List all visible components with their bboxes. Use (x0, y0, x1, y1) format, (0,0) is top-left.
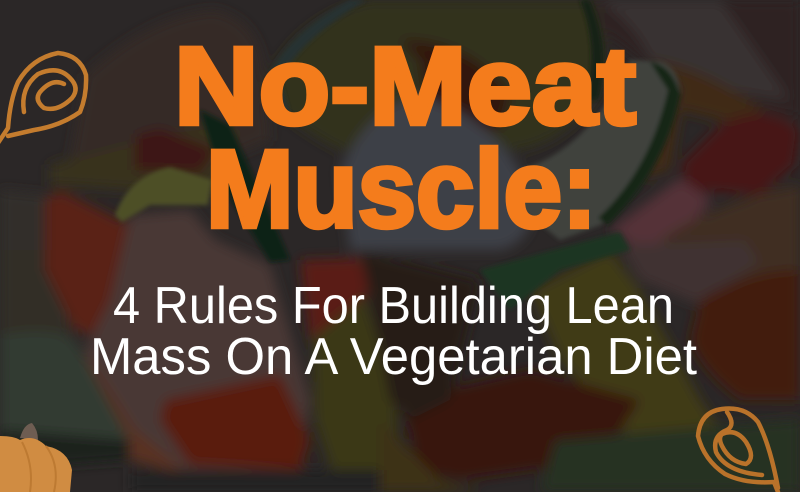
title: No-Meat (174, 25, 636, 148)
subtitle: 4 Rules For Building Lean (113, 277, 674, 335)
icon: whisk top left (0, 53, 86, 143)
icon: whisk bottom right (698, 409, 778, 492)
title (174, 25, 636, 251)
title: Muscle: (206, 128, 597, 251)
subtitle (90, 277, 698, 386)
icon: pumpkin (0, 423, 72, 492)
subtitle: Mass On A Vegetarian Diet (90, 328, 698, 386)
